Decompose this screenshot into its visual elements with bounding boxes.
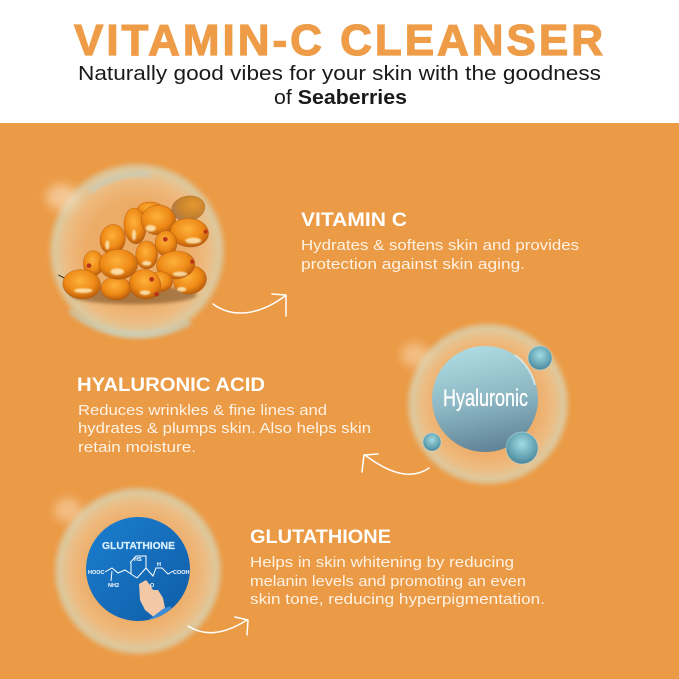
- icon: glutathione molecule disc: H: [157, 562, 161, 568]
- subtitle: Naturally good vibes for your skin with the goodness: [78, 63, 601, 85]
- text block: hyaluronic acid: hydrates & plumps skin. Also helps skin: [78, 420, 371, 437]
- text block: vitamin C: [301, 210, 579, 273]
- panel: glutathione bubble: [53, 486, 223, 656]
- icon: glutathione molecule disc: HS: [134, 557, 142, 563]
- icon: glutathione molecule disc: [86, 517, 190, 632]
- text block: hyaluronic acid: [77, 375, 371, 456]
- text block: glutathione: GLUTATHIONE: [250, 527, 391, 548]
- icon: seaberries: [58, 193, 210, 304]
- text block: hyaluronic acid: HYALURONIC ACID: [77, 375, 265, 396]
- text block: glutathione: Helps in skin whitening by reducing: [250, 554, 514, 571]
- arrow: hyaluronic acid: [362, 454, 429, 474]
- icon: hyaluronic sphere: Hyaluronic: [443, 385, 528, 412]
- text block: hyaluronic acid: Reduces wrinkles & fine lines and: [78, 402, 327, 419]
- icon: glutathione molecule disc: HOOC: [88, 570, 105, 576]
- icon: glutathione molecule disc: O: [150, 583, 155, 589]
- panel: vitamin C bubble with seaberries: [46, 162, 226, 340]
- icon: glutathione molecule disc: NH2: [108, 583, 119, 589]
- subtitle: of Seaberries: [274, 87, 407, 109]
- text block: vitamin C: Hydrates & softens skin and provides: [301, 237, 579, 254]
- arrow: vitamin C: [213, 294, 286, 316]
- icon: glutathione molecule disc: COOH: [173, 570, 190, 576]
- title: VITAMIN-C CLEANSER: [74, 16, 603, 65]
- subtitle: [78, 63, 601, 109]
- arrow: glutathione: [188, 617, 248, 635]
- text block: glutathione: melanin levels and promoting an even: [250, 573, 526, 590]
- icon: glutathione molecule disc: GLUTATHIONE: [102, 541, 175, 552]
- text block: vitamin C: protection against skin aging.: [301, 256, 525, 273]
- text block: hyaluronic acid: retain moisture.: [78, 439, 196, 456]
- text block: glutathione: skin tone, reducing hyperpigmentation.: [250, 591, 545, 608]
- panel: hyaluronic bubble: [401, 322, 570, 486]
- icon: small spheres: [423, 346, 552, 464]
- text block: glutathione: [250, 527, 545, 608]
- text block: vitamin C: VITAMIN C: [301, 210, 407, 231]
- icon: hyaluronic sphere: [432, 346, 538, 452]
